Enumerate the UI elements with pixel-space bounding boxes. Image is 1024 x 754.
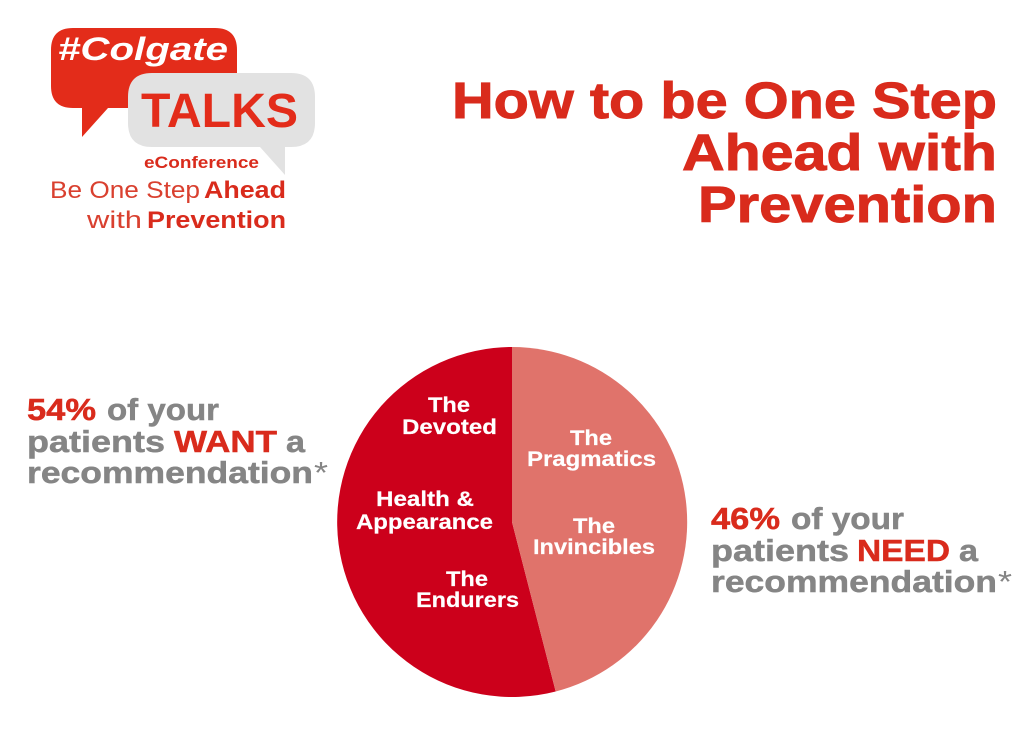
callout: 46% need a recommendation: 46% <box>711 501 780 536</box>
callout: 46% need a recommendation: recommendation <box>711 564 997 599</box>
label: The Pragmatics <box>527 426 656 471</box>
logo: red speech bubble <box>51 28 237 137</box>
pie slice: 46% need <box>512 347 687 692</box>
label: Health & Appearance <box>356 487 493 534</box>
callout: 46% need a recommendation: of your <box>791 501 904 536</box>
label: The Devoted <box>402 393 497 439</box>
callout: 46% need a recommendation <box>711 501 1012 599</box>
callout: 46% need a recommendation: * <box>998 564 1012 599</box>
callout: 54% want a recommendation: recommendation <box>27 455 313 490</box>
title: Ahead with <box>682 124 997 181</box>
pie chart <box>337 347 687 697</box>
callout: 46% need a recommendation: a <box>959 533 979 568</box>
callout: 54% want a recommendation: * <box>314 455 328 490</box>
label: The Devoted: Devoted <box>402 415 497 439</box>
label: Health & Appearance: Appearance <box>356 510 493 534</box>
logo: tagline line 1: Be One Step <box>50 177 200 204</box>
logo: tagline line 1 <box>50 177 286 204</box>
callout: 54% want a recommendation <box>27 392 328 490</box>
label: The Endurers: The <box>446 567 488 591</box>
logo: tagline line 2: with <box>86 207 142 234</box>
pie slice: 54% want <box>337 347 556 697</box>
label: The Devoted: The <box>428 393 470 417</box>
title: Prevention <box>698 176 997 233</box>
callout: 54% want a recommendation: patients <box>27 424 165 459</box>
label: The Endurers <box>416 567 519 612</box>
label: The Endurers: Endurers <box>416 588 519 612</box>
logo: tagline line 2 <box>86 207 286 234</box>
title: How to be One Step <box>452 72 997 129</box>
logo: tagline line 1: Ahead <box>204 177 286 204</box>
label: The Invincibles: The <box>573 514 615 538</box>
label: The Pragmatics: The <box>570 426 612 450</box>
logo: Colgate wordmark: #Colgate <box>58 31 228 67</box>
callout: 46% need a recommendation: patients <box>711 533 849 568</box>
logo: TALKS: TALKS <box>141 85 298 138</box>
callout: 54% want a recommendation: WANT <box>174 424 277 459</box>
label: The Pragmatics: Pragmatics <box>527 447 656 471</box>
logo: grey speech bubble <box>128 73 315 175</box>
label: The Invincibles: Invincibles <box>533 535 655 559</box>
logo: tagline line 2: Prevention <box>147 207 286 234</box>
callout: 54% want a recommendation: 54% <box>27 392 96 427</box>
title <box>452 72 997 233</box>
label: The Invincibles <box>533 514 655 559</box>
callout: 54% want a recommendation: of your <box>107 392 219 427</box>
callout: 54% want a recommendation: a <box>286 424 306 459</box>
callout: 46% need a recommendation: NEED <box>857 533 950 568</box>
logo: Colgate Talks eConference <box>50 28 315 234</box>
label: Health & Appearance: Health & <box>376 487 474 511</box>
logo: eConference: eConference <box>144 153 259 172</box>
